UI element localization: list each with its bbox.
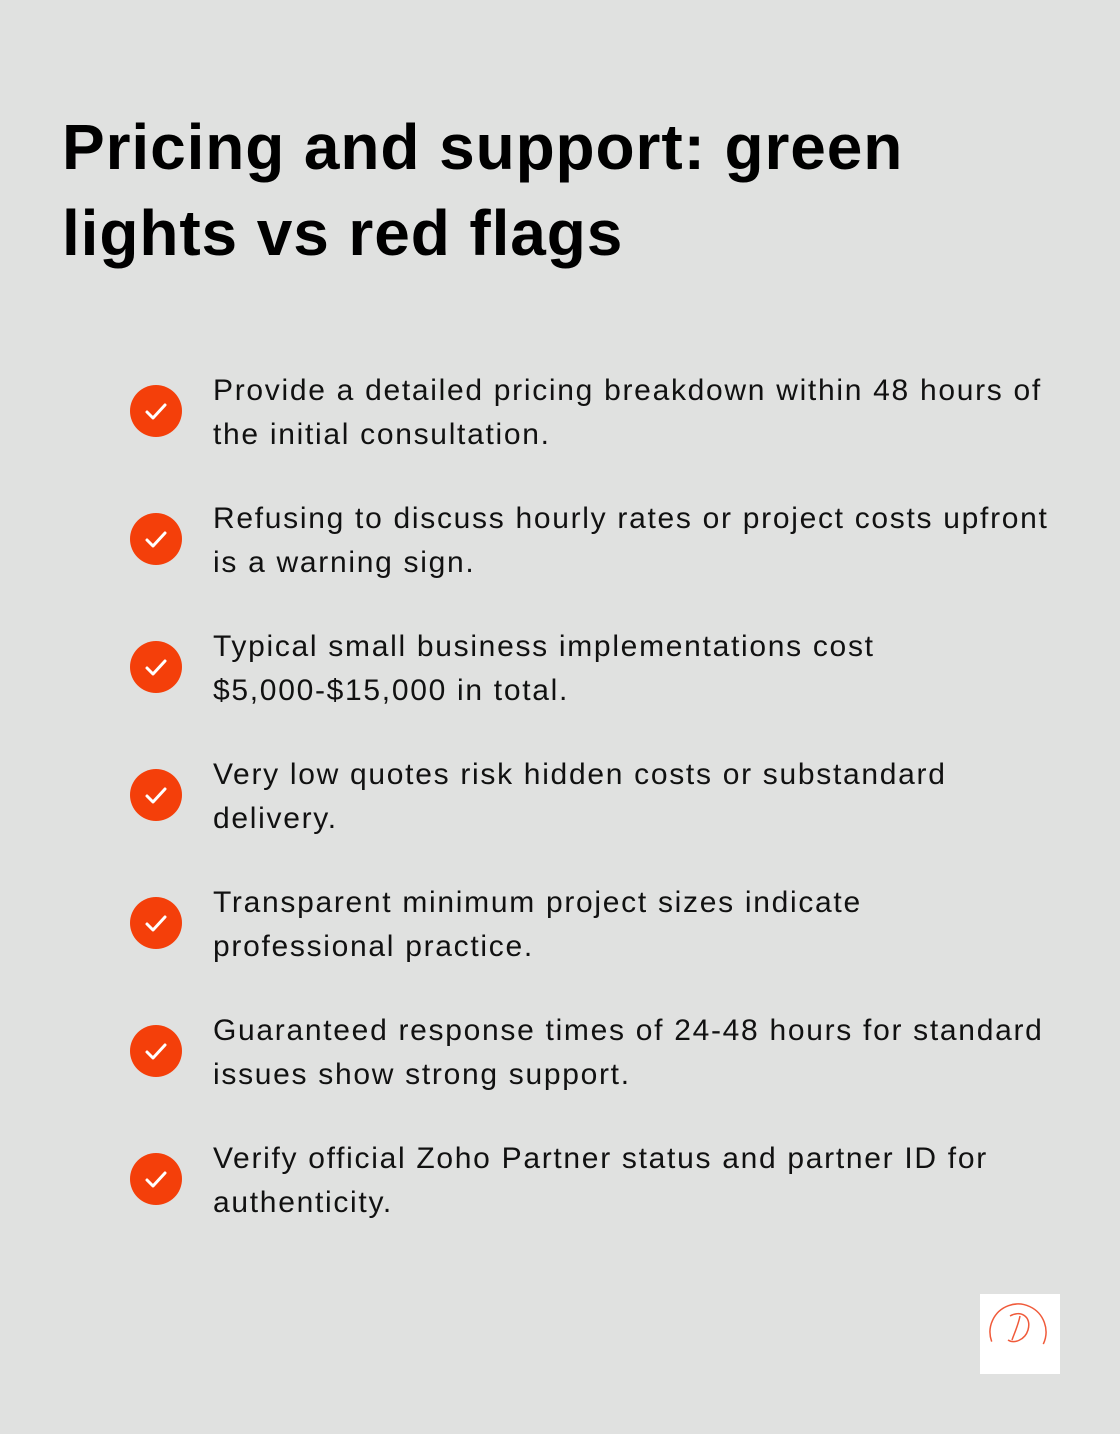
item 4 bbox=[130, 758, 947, 835]
title bbox=[62, 111, 903, 269]
item 2: Refusing to discuss hourly rates or project costs upfront bbox=[213, 502, 1049, 535]
item 3: $5,000-$15,000 in total. bbox=[213, 674, 569, 707]
item 7: Verify official Zoho Partner status and partner ID for bbox=[213, 1142, 988, 1175]
item 7: authenticity. bbox=[213, 1186, 393, 1219]
item 1: the initial consultation. bbox=[213, 418, 551, 451]
item 5 bbox=[130, 886, 862, 963]
item 4: delivery. bbox=[213, 802, 338, 835]
item 2: is a warning sign. bbox=[213, 546, 475, 579]
item 2 bbox=[130, 502, 1049, 579]
item 3: Typical small business implementations cost bbox=[213, 630, 875, 663]
item 1 bbox=[130, 374, 1042, 451]
title: lights vs red flags bbox=[62, 197, 623, 269]
item 1: Provide a detailed pricing breakdown within 48 hours of bbox=[213, 374, 1042, 407]
item 5: professional practice. bbox=[213, 930, 534, 963]
item 6 bbox=[130, 1014, 1044, 1091]
item 6: Guaranteed response times of 24-48 hours for standard bbox=[213, 1014, 1044, 1047]
item 7 bbox=[130, 1142, 988, 1219]
logo bbox=[980, 1294, 1060, 1374]
item 6: issues show strong support. bbox=[213, 1058, 631, 1091]
item 3 bbox=[130, 630, 875, 707]
title: Pricing and support: green bbox=[62, 111, 903, 183]
item 4: Very low quotes risk hidden costs or substandard bbox=[213, 758, 947, 791]
item 5: Transparent minimum project sizes indicate bbox=[213, 886, 862, 919]
